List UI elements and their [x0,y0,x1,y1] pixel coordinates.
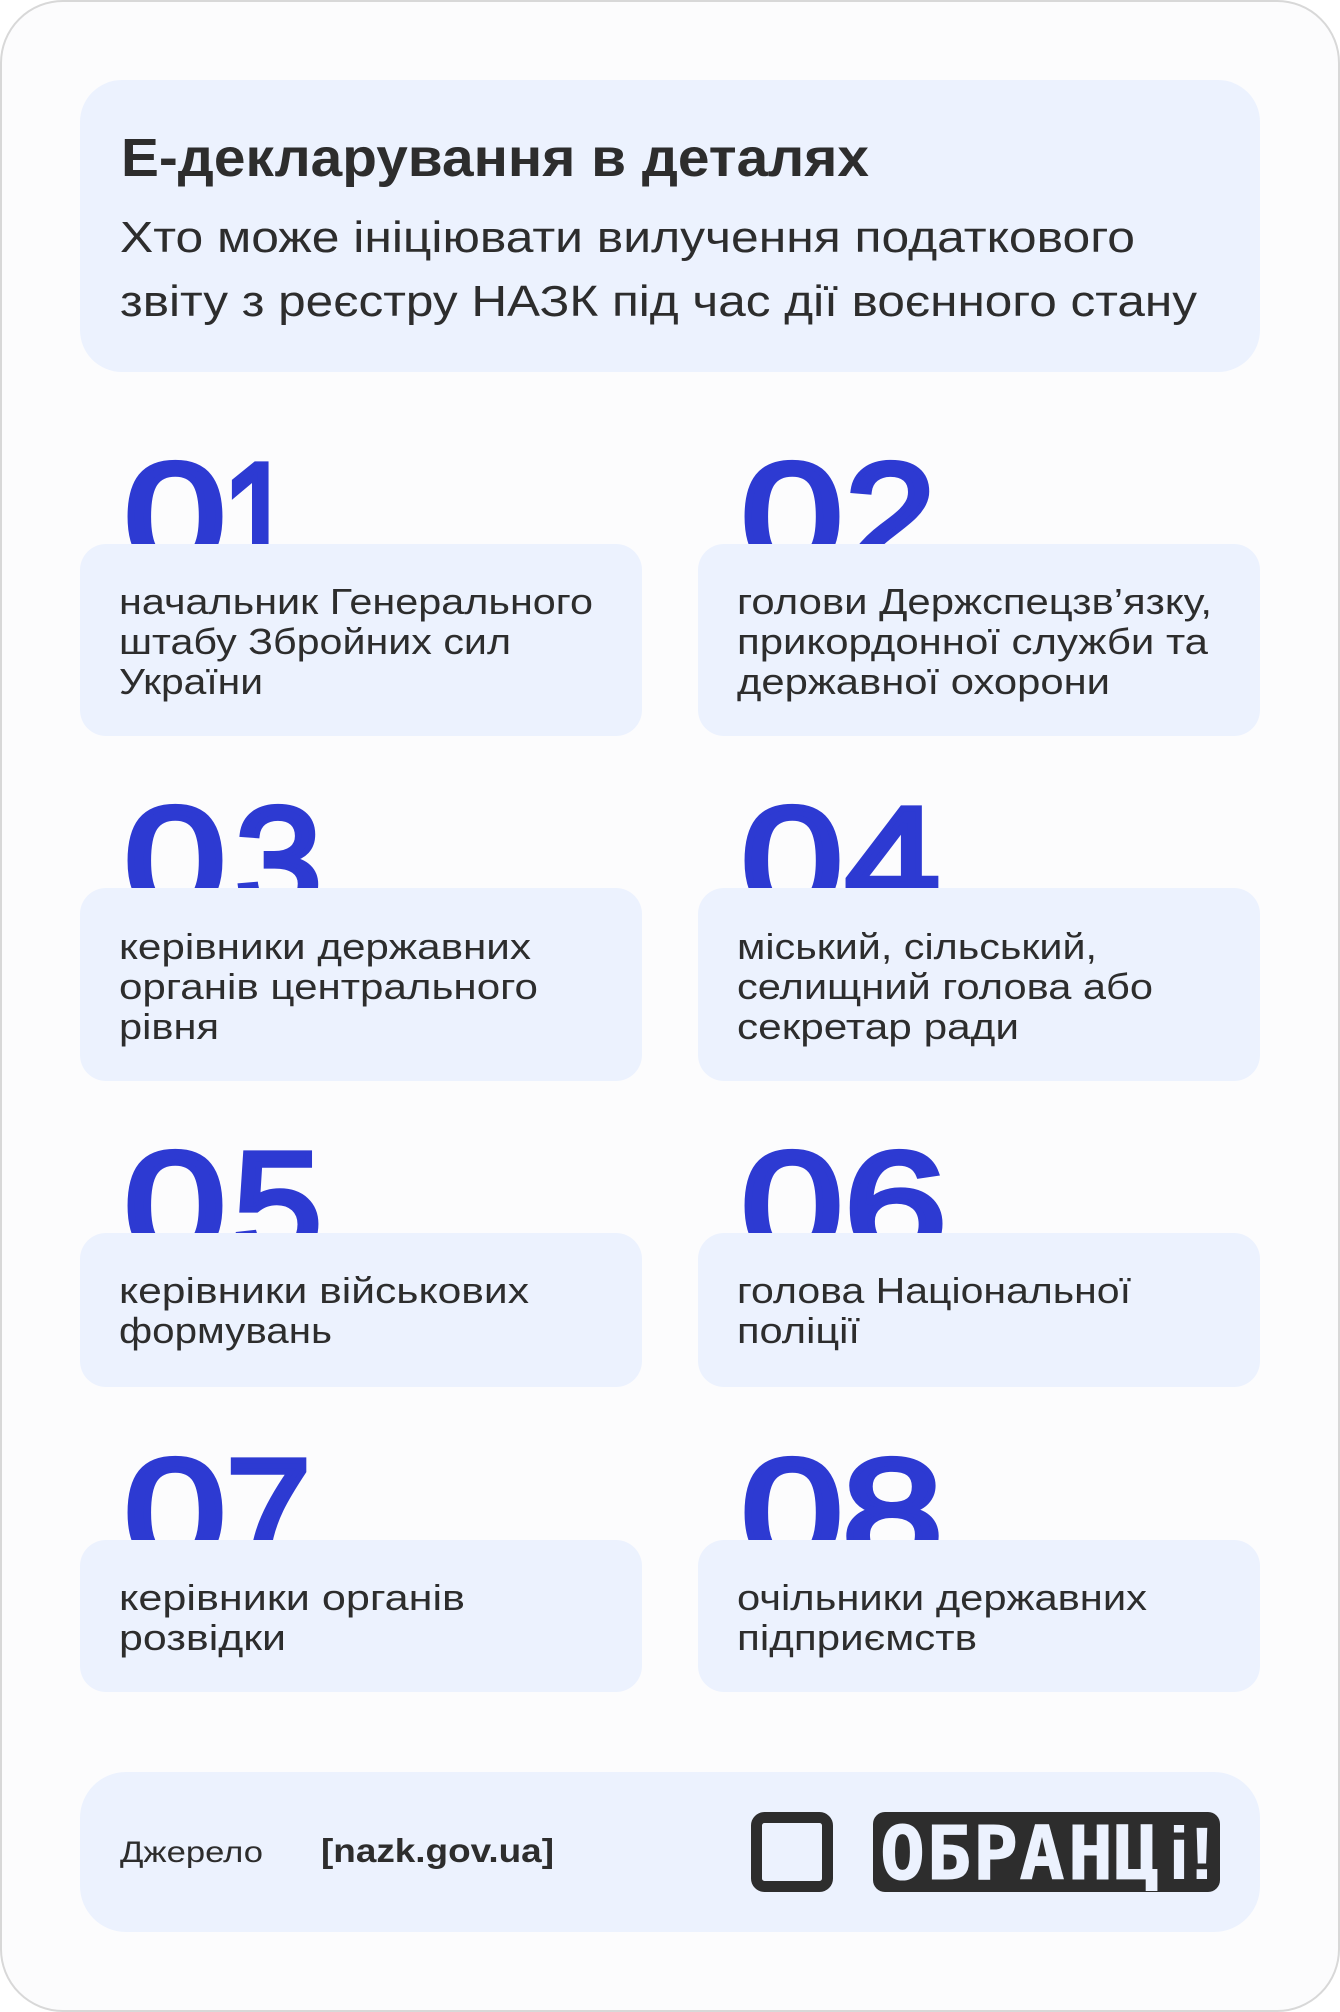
source label: Джерело [120,1836,263,1869]
logo: wordmark: Р [973,1811,1018,1897]
item 07 [80,1428,642,1692]
panel: header [80,80,1260,372]
logo: wordmark: Б [926,1811,972,1897]
card 01 [80,544,642,736]
number 07 [124,1428,311,1598]
logo: wordmark: Ц [1114,1811,1159,1897]
card 03 text [119,926,538,1047]
number 06: 0 [741,1121,843,1291]
card 04 text: секретар ради [737,1006,1019,1047]
number 08: 0 [741,1428,843,1598]
panel: footer [80,1772,1260,1932]
number 02: 0 [741,432,843,602]
number 05: 0 [124,1121,226,1291]
number 03: 0 [124,776,226,946]
card 05 text [119,1270,529,1351]
card 06 text [737,1270,1131,1351]
card 04 text [737,926,1153,1047]
card 04 [698,888,1260,1081]
card 06 text: поліції [737,1310,860,1351]
card 06 [698,1233,1260,1387]
number 01 [124,432,294,602]
number 03: 3 [235,776,322,946]
item 03 [80,776,642,1081]
number 08 [741,1428,943,1598]
item 02 [698,432,1260,736]
subtitle: звіту з реєстру НАЗК під час дії воєнного стану [120,277,1197,326]
card 08 text [737,1577,1147,1658]
subtitle: Хто може ініціювати вилучення податкового [120,213,1135,262]
card 05 text: формувань [119,1310,332,1351]
item 06 [698,1121,1260,1387]
card 02 text: голови Держспецзв’язку, [737,581,1212,622]
number 02: 2 [845,432,936,602]
number 05: 5 [233,1121,322,1291]
card 04 text: міський, сільський, [737,926,1097,967]
number 07: 0 [124,1428,226,1598]
card 08 text: очільники державних [737,1577,1147,1618]
logo: wordmark: А [1020,1811,1064,1897]
card 02 text: державної охорони [737,661,1110,702]
number 01: 0 [124,432,226,602]
number 04: 4 [845,776,940,946]
card 01 text: України [119,661,263,702]
card 04 text: селищний голова або [737,966,1153,1007]
card 06 text: голова Національної [737,1270,1131,1311]
number 07: 7 [226,1428,311,1598]
card 01 text: штабу Збройних сил [119,621,511,662]
card 03 [80,888,642,1081]
card 07 text: розвідки [119,1617,286,1658]
card 05 [80,1233,642,1387]
logo: wordmark: О [880,1811,925,1897]
title: Е-декларування в деталях [121,128,869,188]
number 04 [741,776,940,946]
item 01 [80,432,642,736]
card 01 text: начальник Генерального [119,581,593,622]
card 02 text: прикордонної служби та [737,621,1209,662]
card 03 text: рівня [119,1006,219,1047]
item 04 [698,776,1260,1081]
card 02 text [737,581,1212,702]
logo: wordmark: і [1169,1812,1189,1895]
number 06 [741,1121,947,1291]
card 07 [80,1540,642,1692]
logo: wordmark: ! [1190,1812,1214,1895]
card 02 [698,544,1260,736]
logo: wordmark: Н [1068,1811,1113,1897]
source link: [nazk.gov.ua] [321,1832,554,1869]
logo: wordmark [873,1811,1220,1897]
card 01 text [119,581,593,702]
item 05 [80,1121,642,1387]
card 07 text: керівники органів [119,1577,465,1618]
number 01: 1 [222,432,294,602]
subtitle [120,213,1197,326]
icon: logo square [756,1818,828,1886]
card 08 text: підприємств [737,1617,977,1658]
number 04: 0 [741,776,843,946]
number 02 [741,432,936,602]
card 08 [698,1540,1260,1692]
card 05 text: керівники військових [119,1270,529,1311]
card 03 text: органів центрального [119,966,538,1007]
number 08: 8 [842,1428,943,1598]
card 07 text [119,1577,465,1658]
number 06: 6 [844,1121,947,1291]
item 08 [698,1428,1260,1692]
card 03 text: керівники державних [119,926,531,967]
number 05 [124,1121,322,1291]
number 03 [124,776,322,946]
